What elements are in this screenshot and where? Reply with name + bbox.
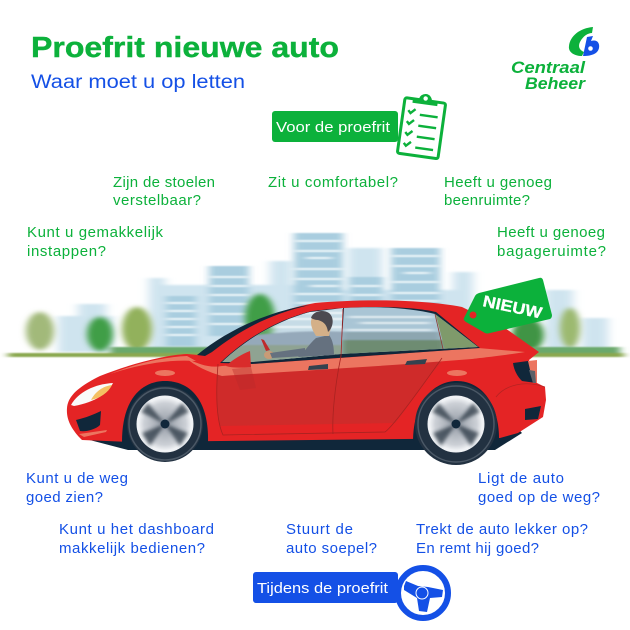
question: stoelen: verstelbaar? (113, 192, 201, 209)
car: side mirror (226, 351, 251, 368)
label: Tijdens de proefrit: Tijdens de proefrit (257, 580, 389, 597)
illustration: red car (67, 300, 546, 465)
sub: blurred trees (26, 294, 580, 352)
question: ligging: Ligt de auto (478, 470, 564, 487)
logo: Centraal Beheer: Centraal (511, 58, 586, 77)
car: main body (67, 300, 546, 442)
subtitle: Waar moet u op letten (31, 72, 245, 93)
question: comfortabel: Zit u comfortabel? (268, 174, 398, 191)
car: front wheel arch (122, 381, 208, 442)
car: front air intake (76, 411, 101, 431)
question: dashboard: makkelijk bedienen? (59, 540, 205, 557)
car: rear window (342, 307, 478, 354)
car: tail light (513, 360, 537, 383)
car: shoulder highlight (186, 348, 525, 376)
label: Voor de proefrit: Voor de proefrit (276, 119, 391, 136)
car: door seams and handles (217, 309, 443, 435)
label: Tijdens de proefrit (253, 572, 398, 603)
logo: Centraal Beheer: Beheer (525, 74, 586, 93)
car: arch highlights (155, 370, 467, 376)
sub: blurred grass strip (8, 347, 624, 357)
logo: Centraal Beheer (511, 27, 599, 93)
tag: NIEUW (464, 278, 552, 334)
question: beenruimte: beenruimte? (444, 192, 530, 209)
car: hood highlight (110, 356, 196, 374)
icon: clipboard checklist (397, 91, 447, 159)
car: bumper highlight (79, 430, 107, 437)
question: optrekken en remmen: En remt hij goed? (416, 540, 539, 557)
car: rear bumper seam (496, 384, 545, 397)
car: rear reflector (525, 406, 541, 420)
question: stoelen: Zijn de stoelen (113, 174, 215, 191)
question: ligging: goed op de weg? (478, 489, 600, 506)
label: Voor de proefrit (272, 111, 398, 142)
title: Proefrit nieuwe auto (31, 32, 339, 64)
question: beenruimte: Heeft u genoeg (444, 174, 552, 191)
background: blurred city skyline (8, 233, 624, 357)
question: bagageruimte: bagageruimte? (497, 243, 606, 260)
question: bagageruimte: Heeft u genoeg (497, 224, 605, 241)
car: mirror shadow (232, 367, 256, 390)
car: window frame (220, 307, 480, 364)
car: front wheel (127, 386, 203, 462)
car: rear wheel (415, 383, 497, 465)
car: underbody shadow (82, 410, 522, 450)
car: driver (261, 311, 334, 359)
question: instappen: Kunt u gemakkelijk (27, 224, 164, 241)
car: headlight (71, 383, 113, 406)
car: windscreen edge dark (197, 305, 310, 356)
car: rear wheel arch (413, 381, 499, 442)
car: front window (222, 308, 343, 362)
question: instappen: instappen? (27, 243, 106, 260)
car: dark side panel (217, 358, 445, 426)
question: weg zien: Kunt u de weg (26, 470, 128, 487)
question: sturen: auto soepel? (286, 540, 377, 557)
question: sturen: Stuurt de (286, 521, 353, 538)
question: weg zien: goed zien? (26, 489, 103, 506)
tag: NIEUW: NIEUW (481, 293, 544, 323)
question: dashboard: Kunt u het dashboard (59, 521, 214, 538)
icon: steering wheel (398, 568, 448, 618)
question: optrekken en remmen: Trekt de auto lekker op? (416, 521, 588, 538)
